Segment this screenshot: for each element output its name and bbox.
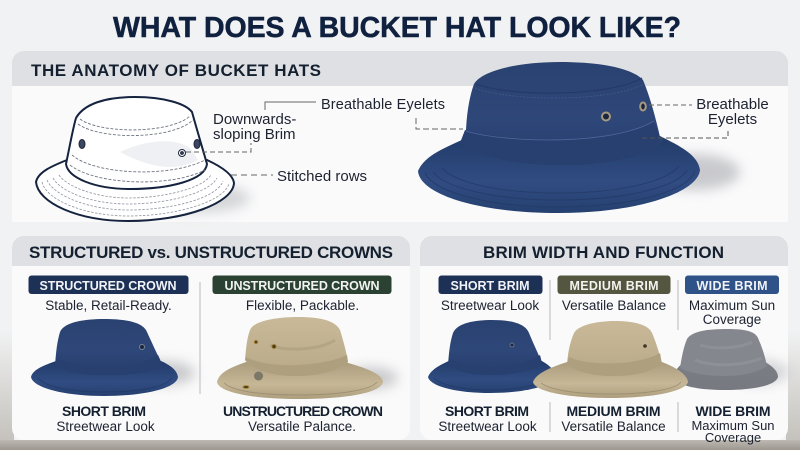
- icon: grey wide brim hat: [673, 329, 790, 390]
- callout: breathable eyelets center: Breathable Eyelets: [321, 97, 445, 113]
- label: unstructured crown, versatile palance: UNSTRUCTURED CROWN: [223, 403, 383, 419]
- callout: downwards-sloping brim: sloping Brim: [213, 126, 296, 143]
- crowns heading: STRUCTURED vs. UNSTRUCTURED CROWNS: [29, 243, 393, 262]
- badge: medium brim: [558, 276, 670, 294]
- callout: stitched rows: Stitched rows: [277, 168, 367, 185]
- anatomy heading: THE ANATOMY OF BUCKET HATS: [31, 61, 321, 80]
- callout: downwards-sloping brim: [186, 111, 296, 152]
- badge: medium brim: MEDIUM BRIM: [570, 279, 658, 293]
- label: medium brim: MEDIUM BRIM: [566, 403, 660, 419]
- brim header bar: [420, 236, 788, 266]
- badge: short brim: SHORT BRIM: [450, 279, 530, 293]
- label: short brim: [438, 403, 537, 434]
- text: maximum sun coverage: Coverage: [703, 312, 761, 327]
- badge: wide brim: [685, 276, 779, 294]
- label: wide brim: [691, 403, 775, 445]
- badge: short brim: [438, 276, 542, 294]
- badge: unstructured crown: [212, 276, 392, 294]
- icon: structured navy hat: [31, 319, 195, 396]
- crowns header bar: [12, 236, 410, 266]
- icon: navy bucket hat photo: [418, 62, 740, 213]
- label: medium brim: Versatile Balance: [561, 419, 666, 434]
- callout: downwards-sloping brim: Downwards-: [213, 111, 296, 128]
- badge: unstructured crown: UNSTRUCTURED CROWN: [224, 279, 380, 293]
- badge: structured crown: [28, 276, 188, 294]
- callout: breathable eyelets center: [265, 97, 463, 129]
- panel: structured vs unstructured crowns: [12, 236, 410, 440]
- text: versatile balance: Versatile Balance: [562, 298, 666, 313]
- label: wide brim: Coverage: [705, 430, 761, 445]
- badge: wide brim: WIDE BRIM: [696, 279, 768, 293]
- text: stable, retail-ready: Stable, Retail-Ready.: [45, 298, 172, 313]
- label: short brim, streetwear look: [56, 403, 155, 434]
- badge: structured crown: STRUCTURED CROWN: [40, 279, 176, 293]
- label: wide brim: WIDE BRIM: [696, 403, 770, 419]
- brim heading: BRIM WIDTH AND FUNCTION: [483, 243, 724, 262]
- icon: khaki medium brim hat: [533, 321, 688, 398]
- label: unstructured crown, versatile palance: [223, 403, 383, 434]
- panel: brim width and function: [420, 236, 790, 445]
- text: streetwear look: Streetwear Look: [441, 298, 539, 313]
- divider: [200, 282, 201, 394]
- dividers: [550, 280, 678, 432]
- panel: anatomy of bucket hats: [12, 51, 788, 222]
- text: maximum sun coverage: Maximum Sun: [689, 298, 775, 313]
- icon: navy short brim hat: [428, 320, 555, 393]
- callout: stitched rows: [231, 168, 367, 185]
- label: unstructured crown, versatile palance: Versatile Palance.: [248, 419, 356, 434]
- eyelets on line drawing: [79, 140, 200, 156]
- label: short brim, streetwear look: SHORT BRIM: [62, 403, 146, 419]
- label: short brim: Streetwear Look: [438, 419, 537, 434]
- icon: unstructured khaki hat: [217, 317, 398, 399]
- callout: breathable eyelets right: Eyelets: [708, 111, 757, 128]
- icon: line drawing of bucket hat: [36, 97, 250, 221]
- label: wide brim: Maximum Sun: [691, 418, 775, 433]
- label: short brim, streetwear look: Streetwear Look: [56, 419, 155, 434]
- label: short brim: SHORT BRIM: [445, 403, 529, 419]
- title: WHAT DOES A BUCKET HAT LOOK LIKE?: [113, 12, 681, 44]
- eyelets on navy hat: [602, 102, 646, 120]
- callout: breathable eyelets right: Breathable: [696, 96, 769, 113]
- text: flexible, packable: Flexible, Packable.: [246, 298, 359, 313]
- label: medium brim: [561, 403, 666, 434]
- callout: breathable eyelets right: [642, 96, 769, 138]
- anatomy header bar: [12, 51, 788, 86]
